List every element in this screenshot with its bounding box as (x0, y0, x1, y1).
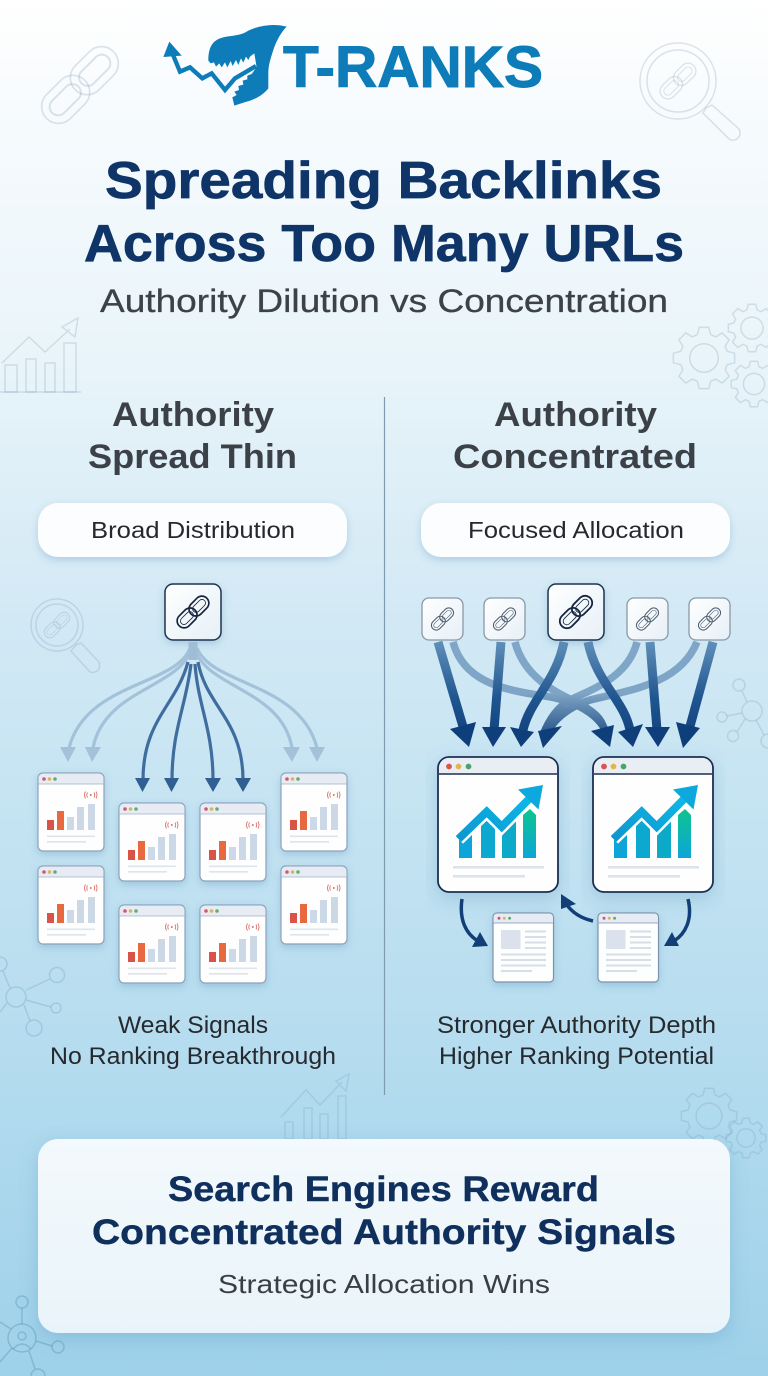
panel: authority concentrated (421, 396, 730, 1070)
heading: spread thin: Authority (112, 396, 274, 434)
panel: authority spread thin (38, 396, 347, 1070)
page card 5 (119, 905, 185, 983)
icon: faint link top left (35, 40, 125, 130)
icon: faint chart left (0, 318, 81, 392)
page card 6 (200, 905, 266, 983)
heading: concentrated: Concentrated (453, 438, 697, 476)
conclusion heading: Concentrated Authority Signals (92, 1213, 676, 1252)
icon: faint network bottom left (0, 1296, 64, 1376)
icon: faint magnifier mid left (31, 599, 100, 672)
center divider (384, 397, 386, 1095)
heading: concentrated: Authority (494, 396, 657, 434)
card grid: weak pages (38, 773, 347, 983)
icon: small link tile 5 (689, 598, 730, 640)
page card 1 (38, 773, 104, 851)
conclusion subtext: Strategic Allocation Wins (218, 1269, 550, 1299)
conclusion heading: Search Engines Reward (168, 1170, 599, 1209)
title: Spreading Backlinks (105, 152, 662, 210)
heading: concentrated (453, 396, 697, 476)
caption: stronger authority: Higher Ranking Potential (439, 1043, 714, 1070)
caption: weak signals (50, 1012, 336, 1070)
logo: T-RANKS (163, 25, 543, 106)
heading: spread thin: Spread Thin (88, 438, 297, 476)
icon: small link tile 2 (484, 598, 525, 640)
caption: stronger authority (437, 1012, 716, 1070)
icon: faint magnifier top right (640, 43, 740, 140)
caption: weak signals: Weak Signals (118, 1012, 268, 1039)
icon: main link tile (548, 584, 604, 640)
arrows: internal links (461, 894, 690, 947)
icon: faint chart bottom (281, 1074, 349, 1139)
title: Across Too Many URLs (84, 215, 684, 273)
page card 4 (200, 803, 266, 881)
logo wordmark: T-RANKS (283, 35, 543, 100)
pill: focused allocation (421, 503, 730, 557)
arrows: straight and converging links (438, 642, 713, 730)
heading: spread thin (88, 396, 297, 476)
arrowheads (450, 722, 700, 748)
caption: weak signals: No Ranking Breakthrough (50, 1043, 336, 1070)
page card 2 (38, 866, 104, 944)
arrows: crossing curves (453, 642, 697, 735)
pill: focused allocation: Focused Allocation (468, 517, 684, 543)
pill: broad distribution: Broad Distribution (91, 517, 295, 543)
page card 3 (119, 803, 185, 881)
subtitle: Authority Dilution vs Concentration (100, 283, 668, 319)
big page: left growth chart (438, 757, 558, 892)
conclusion heading (92, 1170, 676, 1252)
title (84, 152, 684, 273)
small page: left document (493, 913, 554, 982)
icon: small link tile 4 (627, 598, 668, 640)
icon: faint network left (0, 957, 64, 1036)
icon: faint gears bottom right (681, 1088, 766, 1158)
icon: faint gears right (673, 304, 768, 407)
panel: conclusion (38, 1139, 730, 1333)
page card 8 (281, 866, 347, 944)
icon: source link tile (165, 584, 221, 640)
big page: right growth chart (593, 757, 713, 892)
icon: dinosaur head with rising arrow (163, 25, 287, 106)
arrows: faded outer links (60, 642, 325, 762)
pill: broad distribution (38, 503, 347, 557)
page card 7 (281, 773, 347, 851)
icon: small link tile 1 (422, 598, 463, 640)
small page: right document (598, 913, 658, 982)
arrows: stronger middle links (135, 662, 251, 792)
caption: stronger authority: Stronger Authority Depth (437, 1012, 716, 1039)
icon: faint network right (717, 679, 768, 748)
